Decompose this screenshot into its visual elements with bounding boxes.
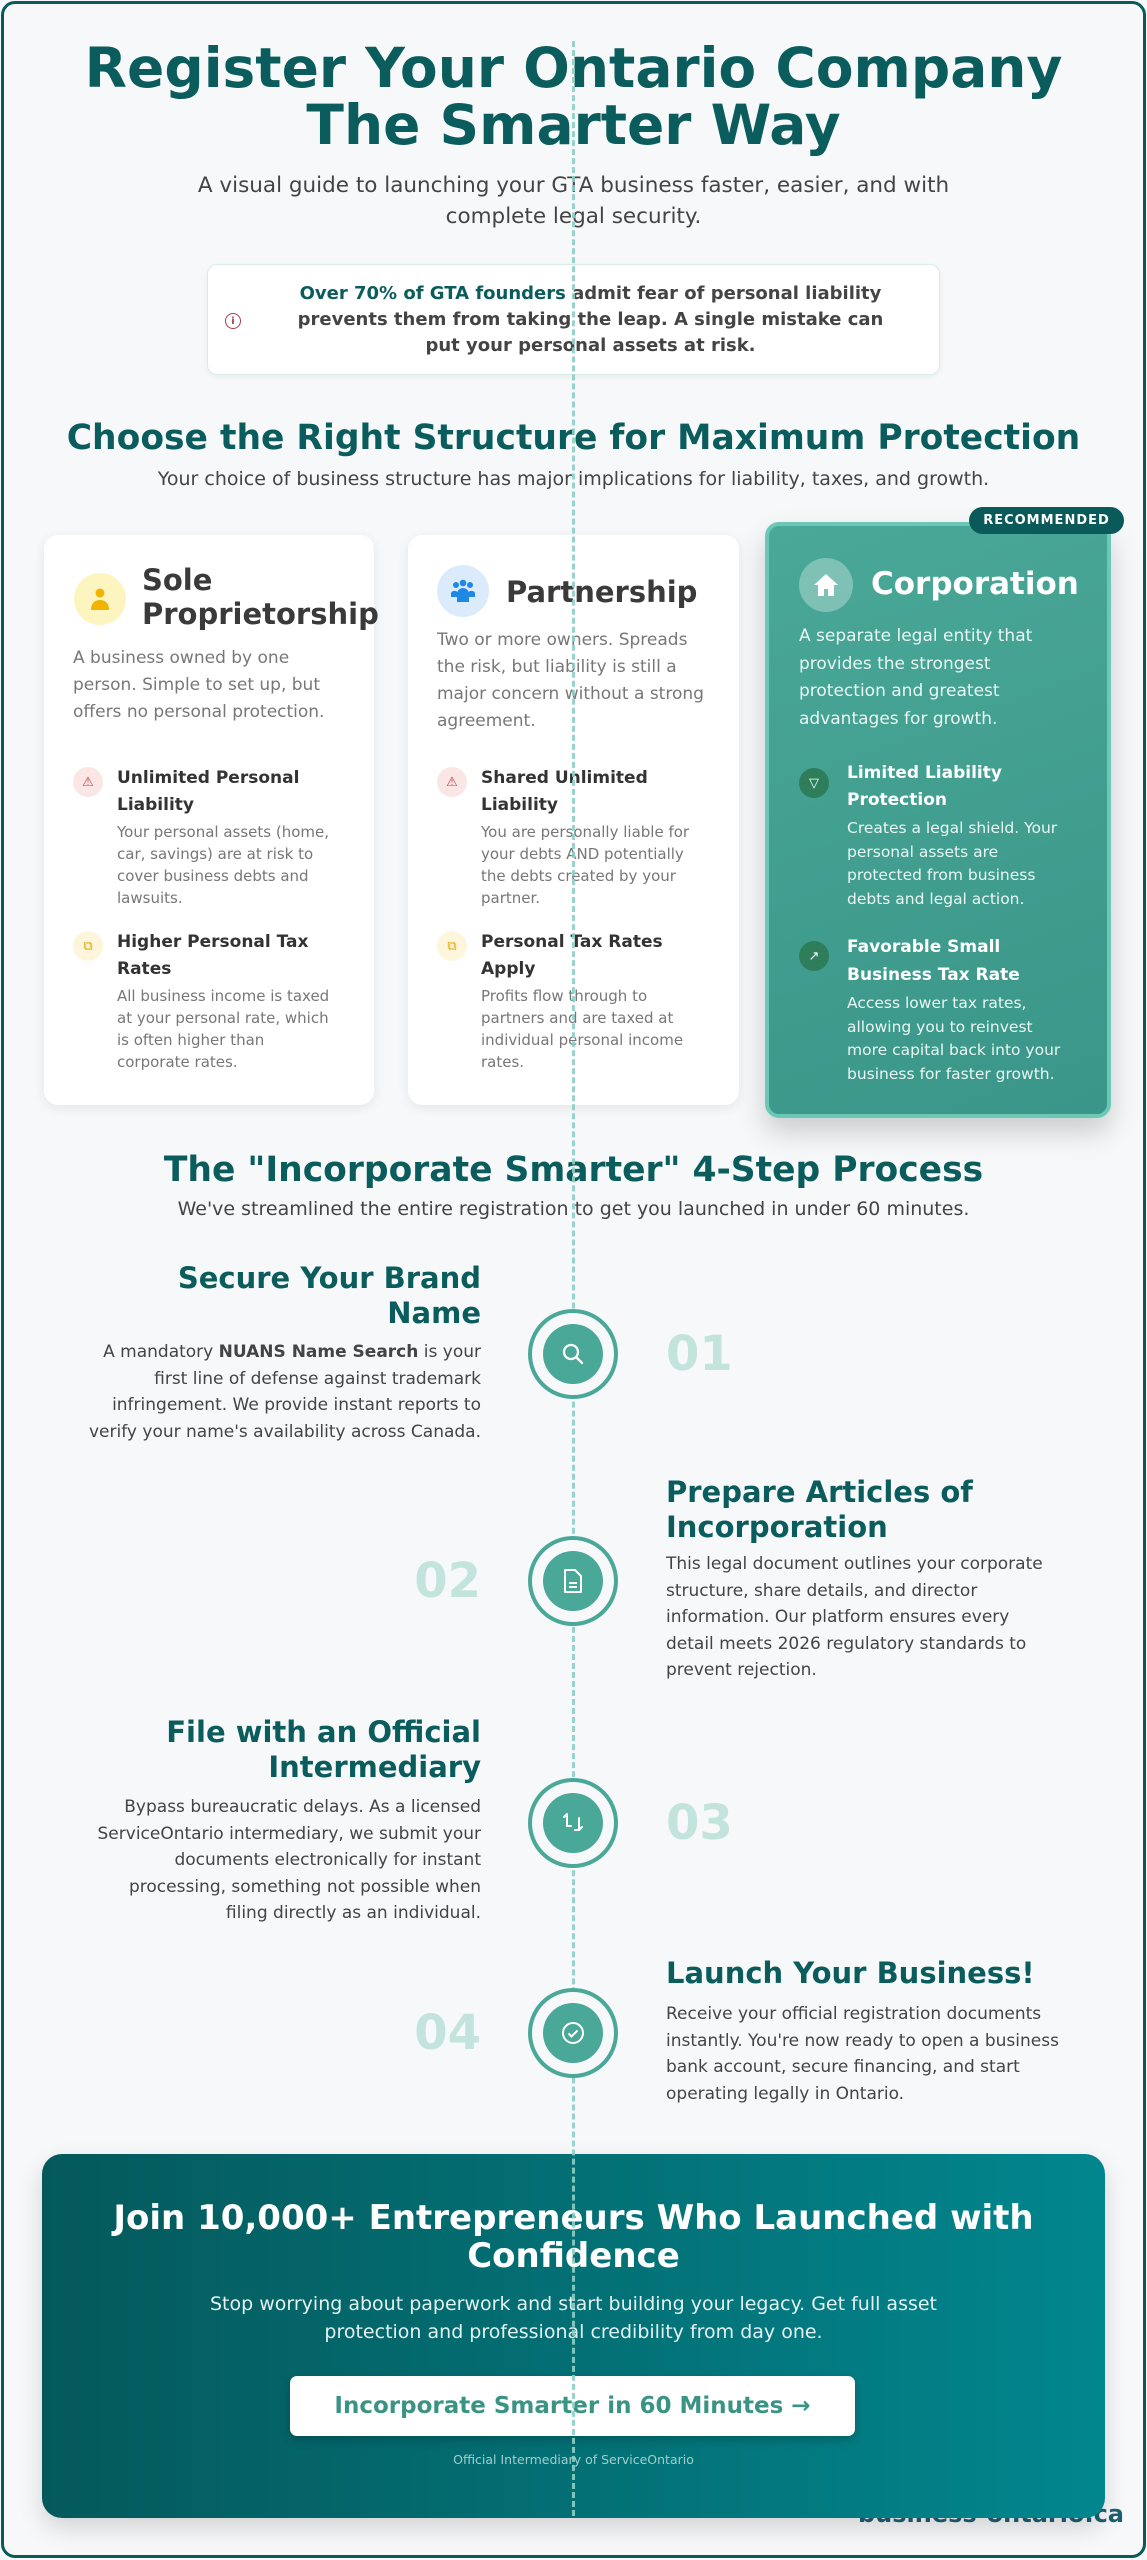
step 2 bbox=[414, 1475, 1043, 1680]
card description: Two or more owners. Spreads the risk, but liability is still a major concern without a strong agreement. bbox=[437, 630, 704, 731]
panel: sole proprietorship: Unlimited Personal Liability bbox=[117, 768, 299, 815]
panel: corporation (recommended): ▽ bbox=[809, 776, 819, 790]
icon: step 4 check bbox=[528, 1988, 618, 2078]
icon: step 2 document bbox=[528, 1536, 618, 1626]
step description: Receive your official registration documents instantly. You're now ready to open a business bank account, secure financing, and start operating legally in Ontario. bbox=[666, 2004, 1059, 2104]
step title: File with an Official Intermediary bbox=[166, 1715, 481, 1784]
icon: step 1 search bbox=[528, 1309, 618, 1399]
subheading: structure: Your choice of business structure has major implications for liability, taxes, and growth. bbox=[158, 468, 989, 490]
subtitle: A visual guide to launching your GTA business faster, easier, and with complete legal security. bbox=[198, 173, 949, 229]
card title: Corporation bbox=[871, 566, 1079, 602]
panel: sole proprietorship: All business income is taxed at your personal rate, which is often higher than corporate rates. bbox=[117, 987, 329, 1071]
badge: recommended: RECOMMENDED bbox=[983, 513, 1110, 528]
panel: sole proprietorship: Your personal assets (home, car, savings) are at risk to cover business debts and lawsuits. bbox=[117, 823, 329, 907]
item: higher tax bbox=[73, 931, 329, 1071]
step 1 bbox=[89, 1261, 733, 1442]
footer url: business-ontario.ca bbox=[858, 2500, 1124, 2528]
step title: Secure Your Brand Name bbox=[178, 1261, 481, 1330]
panel: corporation (recommended) bbox=[765, 522, 1111, 1118]
item: tax rate bbox=[799, 937, 1060, 1082]
number: 03 bbox=[666, 1795, 733, 1851]
panel: partnership: Personal Tax Rates Apply bbox=[481, 932, 663, 979]
number: 01 bbox=[666, 1326, 733, 1382]
step 4 bbox=[414, 1956, 1059, 2104]
heading: process: The "Incorporate Smarter" 4-Step Process bbox=[164, 1150, 983, 1190]
card description: A business owned by one person. Simple to set up, but offers no personal protection. bbox=[73, 648, 324, 722]
item: limited liability bbox=[799, 763, 1058, 908]
step description: Bypass bureaucratic delays. As a licensed ServiceOntario intermediary, we submit your documents electronically for instant processing, something not possible when filing directly as an individual. bbox=[98, 1797, 481, 1923]
CTA title: Join 10,000+ Entrepreneurs Who Launched with Confidence bbox=[113, 2198, 1034, 2276]
card title: Proprietorship bbox=[142, 597, 379, 631]
icon: step 3 transfer bbox=[528, 1778, 618, 1868]
panel: partnership: Shared Unlimited Liability bbox=[481, 768, 648, 815]
panel: corporation (recommended): Access lower tax rates, allowing you to reinvest more capital back into your business for faster growth. bbox=[847, 994, 1060, 1082]
CTA note: Official Intermediary of ServiceOntario bbox=[453, 2452, 694, 2467]
panel: partnership: ⧉ bbox=[447, 938, 457, 954]
panel: partnership bbox=[408, 535, 739, 1105]
card description: A separate legal entity that provides the strongest protection and greatest advantages for growth. bbox=[799, 626, 1032, 728]
title: The Smarter Way bbox=[306, 93, 841, 157]
number: 02 bbox=[414, 1553, 481, 1609]
panel: partnership: Profits flow through to partners and are taxed at individual personal income rates. bbox=[481, 987, 683, 1071]
icon: info bbox=[225, 313, 241, 329]
step title: Prepare Articles of Incorporation bbox=[666, 1475, 973, 1544]
card title bbox=[142, 563, 379, 631]
panel: partnership: You are personally liable for your debts AND potentially the debts created by your partner. bbox=[481, 823, 689, 907]
panel: sole proprietorship bbox=[44, 535, 374, 1105]
panel: sole proprietorship: ⚠ bbox=[82, 774, 94, 790]
title: Register Your Ontario Company bbox=[85, 36, 1062, 100]
CTA button bbox=[290, 2376, 855, 2436]
number: 04 bbox=[414, 2005, 481, 2061]
title bbox=[85, 36, 1062, 157]
step title: Launch Your Business! bbox=[666, 1956, 1035, 1990]
CTA button: Incorporate Smarter in 60 Minutes → bbox=[334, 2393, 811, 2419]
timeline line bbox=[572, 41, 575, 2516]
panel: corporation (recommended): Favorable Small Business Tax Rate bbox=[847, 937, 1020, 985]
CTA text: Stop worrying about paperwork and start building your legacy. Get full asset protection and professional credibility from day one. bbox=[210, 2293, 937, 2343]
card title: Partnership bbox=[506, 575, 697, 609]
panel: sole proprietorship: ⧉ bbox=[83, 938, 93, 954]
step description: A mandatory NUANS Name Search is your first line of defense against trademark infringement. We provide instant reports to verify your name's availability across Canada. bbox=[89, 1342, 481, 1442]
callout text: Over 70% of GTA founders admit fear of personal liability prevents them from taking the leap. A single mistake can put your personal assets at risk. bbox=[298, 283, 883, 356]
item: shared liability bbox=[437, 767, 690, 907]
step 3 bbox=[98, 1715, 733, 1923]
icon: house bbox=[799, 558, 853, 612]
callout: statistic bbox=[207, 264, 940, 375]
icon: group bbox=[437, 565, 489, 617]
panel: corporation (recommended): ↗ bbox=[809, 948, 819, 964]
card title: Sole bbox=[142, 563, 212, 597]
badge: recommended bbox=[969, 507, 1124, 534]
heading: structure: Choose the Right Structure for Maximum Protection bbox=[67, 418, 1080, 458]
step description: This legal document outlines your corporate structure, share details, and director information. Our platform ensures every detail meets 2026 regulatory standards to prevent rejection. bbox=[666, 1554, 1043, 1680]
panel: partnership: ⚠ bbox=[446, 774, 458, 790]
CTA panel bbox=[42, 2154, 1105, 2518]
panel: sole proprietorship: Higher Personal Tax Rates bbox=[117, 932, 308, 979]
panel: corporation (recommended): Limited Liability Protection bbox=[847, 763, 1002, 810]
panel: corporation (recommended): Creates a legal shield. Your personal assets are protected from business debts and legal action. bbox=[847, 819, 1057, 908]
icon: info: i bbox=[231, 316, 235, 326]
item: unlimited liability bbox=[73, 767, 329, 907]
subheading: process: We've streamlined the entire registration to get you launched in under 60 minutes. bbox=[178, 1198, 969, 1220]
item: personal tax bbox=[437, 931, 683, 1071]
icon: person bbox=[74, 573, 126, 625]
